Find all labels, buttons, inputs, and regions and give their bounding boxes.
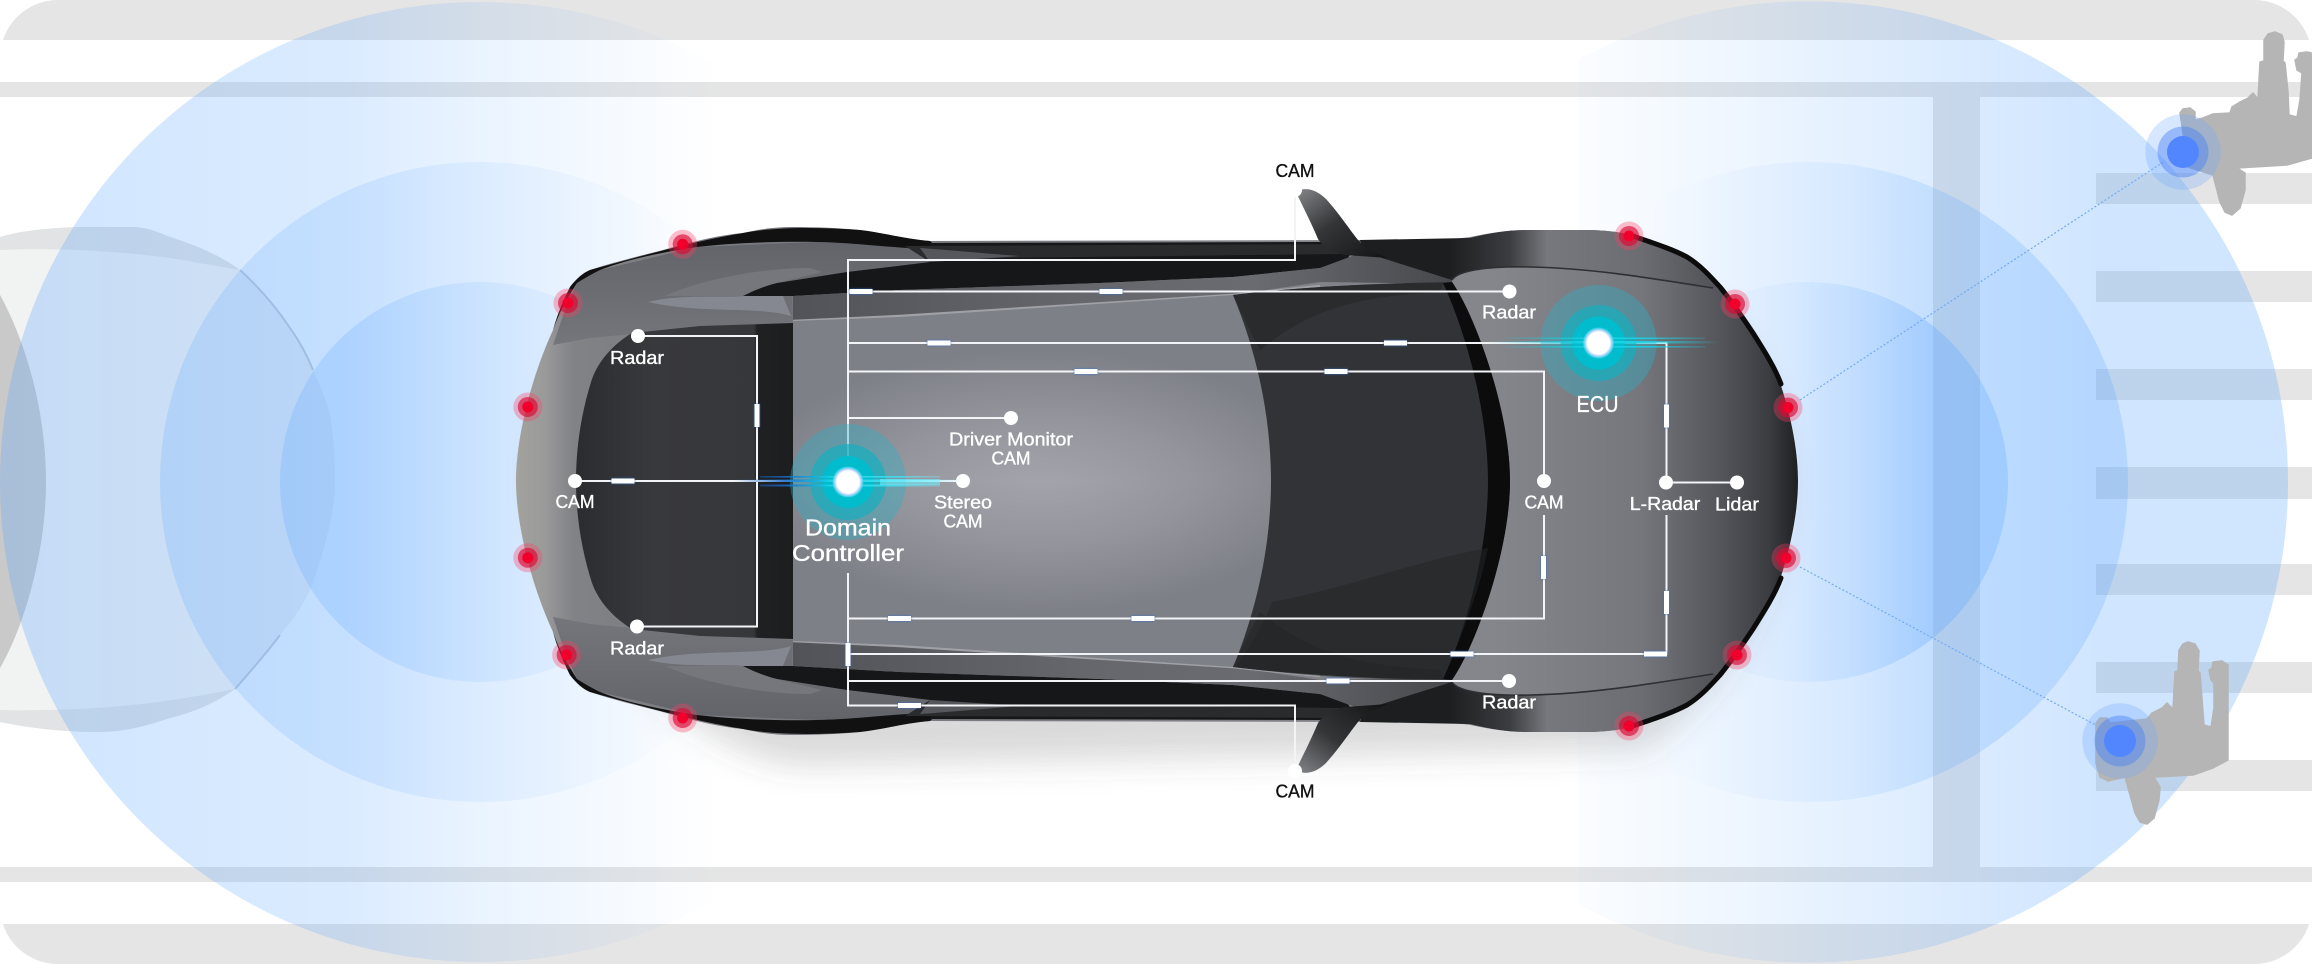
pedestrian: lower [2082, 642, 2228, 824]
sensor nodes [568, 183, 1744, 778]
component labels: Radar [610, 347, 664, 368]
radar sensors (red) [513, 222, 1802, 740]
label: Domain Controller [793, 518, 904, 562]
ECU glow [1490, 285, 1720, 401]
label: Domain Controller: Controller [792, 540, 904, 566]
component labels: CAM [944, 510, 982, 532]
sensing range: right circles [1630, 1, 2288, 963]
sensing range: left circles [0, 2, 662, 962]
pulse: upper pedestrian [2145, 114, 2221, 190]
label: ECU: ECU [1576, 391, 1618, 417]
car shadow [662, 614, 1766, 776]
pulse: lower pedestrian [2082, 703, 2158, 779]
component labels: Radar [1482, 692, 1536, 712]
pedestrian: upper [2145, 32, 2312, 215]
detection line: lower pedestrian [1800, 567, 2105, 730]
component labels: CAM [1276, 780, 1314, 802]
component labels [556, 160, 1759, 802]
component labels: L-Radar [1630, 493, 1700, 514]
domain controller glow [734, 424, 965, 540]
component labels: CAM [556, 491, 594, 512]
car lower half [516, 481, 1798, 773]
car [516, 189, 1798, 773]
car upper half [516, 189, 1798, 481]
component labels: Driver Monitor [949, 428, 1073, 450]
component labels: CAM [992, 448, 1030, 468]
component labels: CAM [1524, 492, 1564, 512]
windshield lower shading [1236, 548, 1488, 679]
detection line: upper pedestrian [1800, 161, 2165, 400]
component labels: Radar [610, 638, 664, 658]
component labels: Radar [1482, 302, 1536, 322]
component labels: CAM [1276, 160, 1314, 181]
component labels: Lidar [1715, 494, 1759, 514]
wiring network [575, 190, 1737, 771]
ghost car ahead [0, 227, 335, 732]
component labels: Stereo [934, 492, 992, 512]
label: Domain Controller: Domain [805, 514, 891, 540]
wire connectors [612, 289, 1669, 708]
